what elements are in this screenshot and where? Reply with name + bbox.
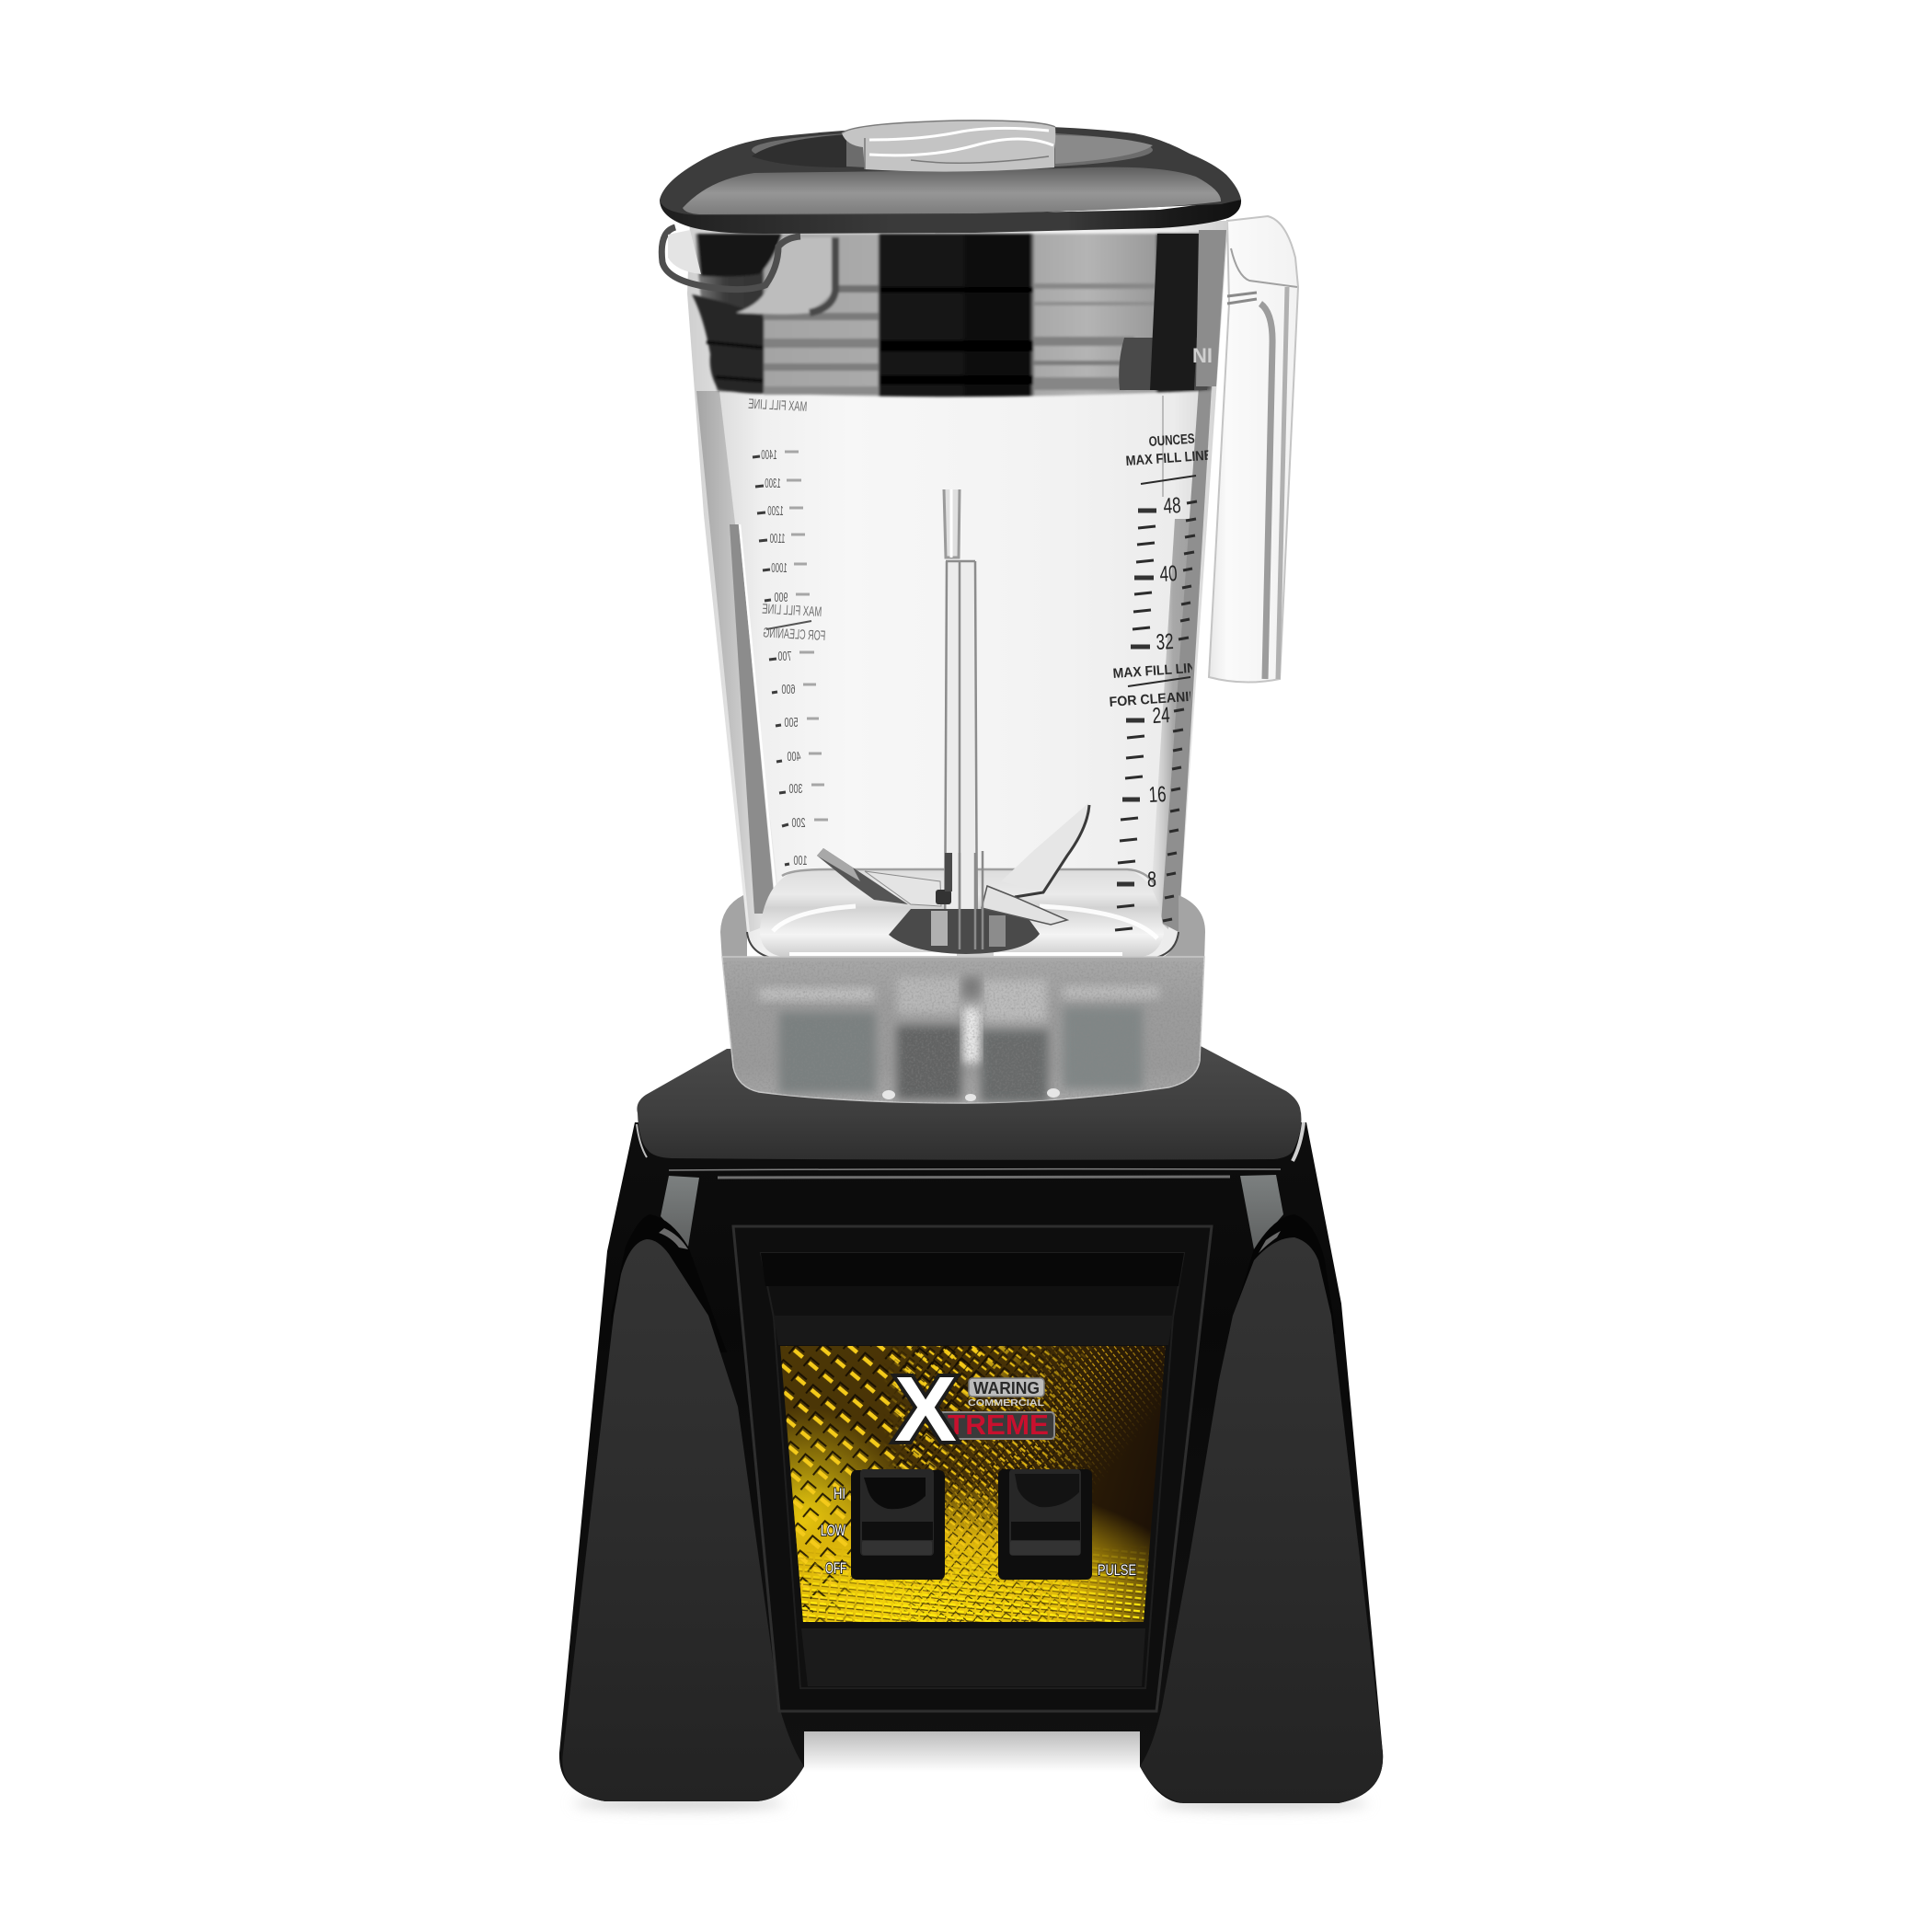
collar mid light left <box>897 977 960 1014</box>
bottom streak mesh <box>798 1548 1149 1622</box>
left scale numbers: 100 <box>793 853 808 868</box>
collar rib dots <box>882 1088 1060 1101</box>
lid opening <box>752 131 1153 169</box>
shaft lower lines <box>960 851 983 949</box>
left scale numbers: 600 <box>781 682 796 697</box>
ounce numbers: 40 <box>1159 561 1178 587</box>
ounce captions: MAX FILL LINE <box>1125 447 1213 469</box>
jar <box>661 221 1228 960</box>
switch labels: HI <box>834 1485 845 1502</box>
jar bottom highlight <box>773 906 1157 938</box>
ounce captions <box>1109 431 1213 710</box>
left millilitre scale <box>748 397 828 868</box>
switch labels: OFF <box>825 1559 846 1577</box>
rocker <box>1009 1469 1081 1556</box>
left ridge glint <box>659 1228 688 1249</box>
left scale numbers: 1000 <box>771 559 788 576</box>
collar rim shadow <box>747 932 1179 960</box>
jar collar base <box>720 895 1205 1104</box>
spout interior <box>697 234 782 277</box>
commercial wordmark: COMMERCIAL <box>968 1397 1045 1409</box>
collar dark block middle left <box>897 1026 961 1099</box>
lower bevel strip <box>801 1628 1145 1686</box>
right gloss highlight <box>1240 1175 1283 1249</box>
rocker band <box>1011 1522 1080 1540</box>
left scale dark ticks <box>753 456 789 865</box>
notch shadow <box>804 1730 1140 1772</box>
spout dark line <box>810 237 835 313</box>
collar centre shade <box>962 977 981 997</box>
left scale numbers: 1400 <box>761 446 777 463</box>
waring wordmark: WARING <box>973 1379 1040 1397</box>
blade nut <box>936 890 951 904</box>
ounce numbers: 24 <box>1152 703 1170 729</box>
xtreme logo <box>894 1358 1054 1461</box>
right block highlight <box>1196 230 1226 386</box>
left ridge <box>611 1214 727 1352</box>
left scale numbers: 700 <box>777 649 792 664</box>
left blade tip <box>817 848 860 881</box>
gloss strip left <box>718 1177 1230 1178</box>
embossed label letters: NI <box>1192 344 1213 367</box>
ounce right ticks <box>1163 501 1197 921</box>
pour spout loop <box>661 227 800 290</box>
right blade edge <box>1015 805 1089 897</box>
right switch <box>998 1469 1092 1580</box>
floor line <box>782 869 1156 885</box>
right dark block <box>1150 234 1200 390</box>
decal base colour <box>780 1346 1166 1620</box>
ounce captions: OUNCES <box>1148 431 1195 450</box>
switch housing <box>851 1470 945 1580</box>
collar rim <box>720 895 1205 961</box>
opening shadow <box>752 134 846 167</box>
ounce major ticks <box>1117 511 1156 884</box>
right ridge <box>1228 1214 1336 1334</box>
rocker <box>860 1469 934 1556</box>
blender base <box>559 1046 1383 1803</box>
lower right blade <box>982 886 1067 925</box>
right ridge glint <box>1259 1231 1281 1253</box>
rocker window <box>1015 1474 1079 1507</box>
hub cone <box>889 909 1040 954</box>
right label block <box>1119 338 1214 390</box>
opening light <box>1055 135 1153 164</box>
jar bottom seam shine <box>789 952 1122 956</box>
ounce numbers: 8 <box>1147 868 1156 892</box>
left scale numbers: 1200 <box>767 502 784 519</box>
mould line <box>1162 396 1164 497</box>
left rib <box>730 524 776 914</box>
base body <box>559 1122 1383 1803</box>
left scale numbers: 300 <box>788 781 803 797</box>
waring plate <box>969 1378 1044 1397</box>
spout highlight <box>668 230 701 274</box>
hub highlight right <box>989 915 1006 947</box>
left scale numbers: 500 <box>784 715 799 730</box>
collar light band right <box>1063 986 1159 998</box>
rocker lip <box>1010 1541 1080 1555</box>
ounce captions: MAX FILL LINE <box>1112 660 1205 682</box>
rocker band <box>862 1522 933 1540</box>
lid <box>660 121 1241 234</box>
left foot panel <box>562 1239 804 1801</box>
inner lid collar <box>692 234 1224 397</box>
lid rim band <box>660 200 1241 234</box>
collar left dark recess <box>692 294 764 394</box>
ounce numbers: 48 <box>1163 493 1181 519</box>
collar inner shapes <box>722 961 1205 1104</box>
left scale light ticks <box>785 452 828 820</box>
fine mesh <box>817 1346 1166 1622</box>
recess upper shade <box>761 1253 1184 1286</box>
collar mid light right <box>983 980 1047 1021</box>
collar centre highlight <box>963 1007 980 1063</box>
lid top surface <box>683 167 1221 214</box>
ounce minor ticks <box>1115 526 1156 930</box>
ounce numbers: 32 <box>1156 629 1174 655</box>
collar frost grain <box>722 961 1205 1104</box>
collar rib notches <box>707 342 764 381</box>
right outer wall <box>1161 386 1212 932</box>
jar glass body <box>687 221 1228 960</box>
switch housing <box>998 1469 1092 1580</box>
front panel <box>733 1226 1212 1711</box>
right foot panel <box>1140 1237 1383 1803</box>
plug shadow lines <box>842 121 1055 169</box>
handle <box>1209 216 1298 683</box>
mirrored fill labels: MAX FILL LINE <box>748 397 808 415</box>
left gloss highlight <box>661 1176 699 1247</box>
big X: X <box>894 1358 957 1461</box>
rocker lip <box>862 1541 932 1555</box>
right ounce scale <box>1109 431 1213 930</box>
treme wordmark: TREME <box>948 1409 1049 1441</box>
blade assembly <box>817 803 1090 954</box>
floor shadow <box>573 1797 1368 1810</box>
collar horizontal bands <box>764 283 1157 395</box>
left plate highlight <box>637 1124 647 1157</box>
ounce captions: FOR CLEANING <box>1109 687 1209 710</box>
top plate <box>637 1046 1301 1160</box>
rocker window <box>864 1478 926 1509</box>
lid dark shell <box>660 125 1241 215</box>
mirrored fill labels: FOR CLEANING <box>763 625 826 644</box>
switch labels: LOW <box>821 1522 845 1539</box>
left rib highlight <box>740 524 777 911</box>
ounce numbers <box>1147 493 1181 892</box>
collar dark block right <box>1064 1007 1143 1088</box>
switch labels: PULSE <box>1098 1561 1136 1579</box>
ounce lines <box>1128 476 1196 686</box>
blade stem <box>945 853 952 891</box>
control decal <box>780 1346 1166 1622</box>
right upright blade <box>1001 803 1090 891</box>
left scale numbers: 400 <box>787 749 801 765</box>
mirrored fill labels <box>748 397 826 644</box>
left scale numbers: 900 <box>774 590 788 605</box>
treme plate <box>942 1412 1054 1439</box>
right wall shading <box>1150 519 1202 929</box>
recess strip <box>774 1316 1173 1345</box>
panel recess <box>761 1253 1184 1688</box>
left outer wall <box>696 391 782 932</box>
collar light band left <box>759 988 874 1000</box>
right plate highlight <box>1293 1122 1304 1161</box>
plug highlights <box>869 128 1053 155</box>
collar dark block middle right <box>981 1030 1048 1102</box>
left switch <box>851 1469 945 1580</box>
clear lid plug <box>842 121 1055 172</box>
blade shaft <box>944 489 977 948</box>
inner floor of jar <box>760 868 1164 957</box>
decal lower glow <box>793 1481 1150 1622</box>
left scale numbers: 1100 <box>769 530 785 546</box>
spout right glass <box>736 237 833 315</box>
left blade underside <box>817 848 908 904</box>
hub highlight <box>931 911 948 946</box>
left scale numbers: 200 <box>791 815 806 831</box>
collar lower panel <box>722 957 1204 1103</box>
left fill line <box>766 621 811 629</box>
decal left glow <box>786 1414 900 1604</box>
switch labels <box>821 1485 1136 1579</box>
mirrored fill labels: MAX FILL LINE <box>762 602 822 620</box>
large mesh <box>782 1346 1036 1622</box>
ounce numbers: 16 <box>1148 782 1167 808</box>
medium mesh <box>885 1346 1091 1622</box>
gloss line under plate <box>669 1169 1281 1170</box>
left scale numbers: 1300 <box>765 475 781 491</box>
left scale numbers <box>761 446 808 868</box>
left blade top <box>865 871 941 906</box>
collar dark block left <box>779 1012 876 1093</box>
